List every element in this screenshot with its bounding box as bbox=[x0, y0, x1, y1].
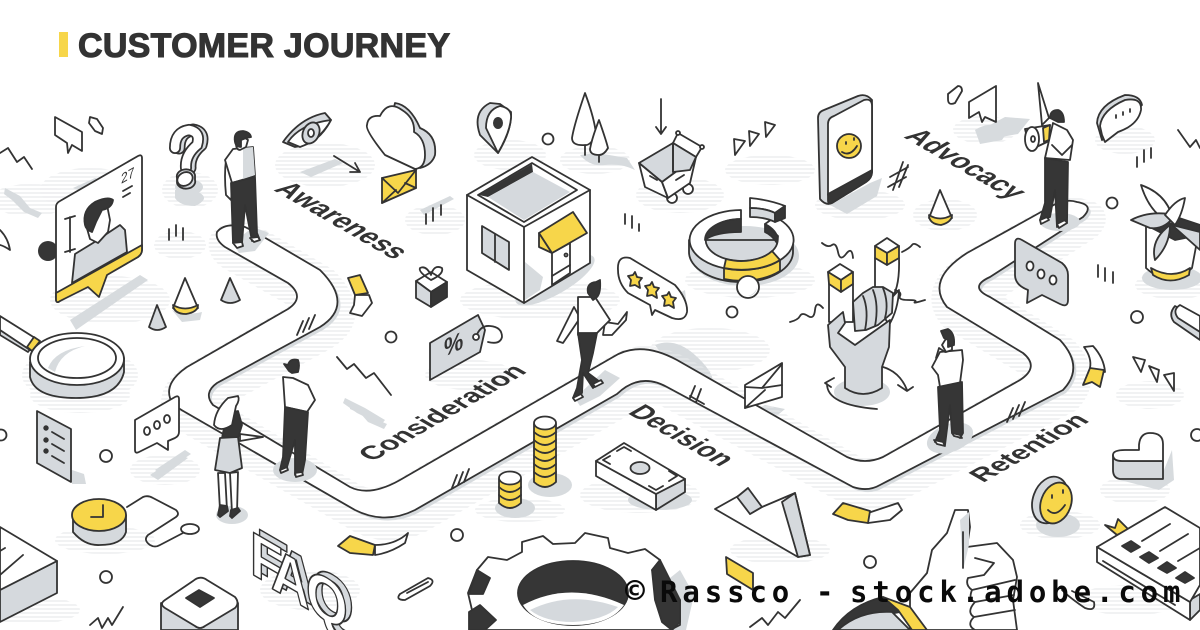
icon: question mark bbox=[175, 130, 203, 195]
road label: Decision: Decision bbox=[621, 400, 742, 471]
icon: rounded block bbox=[90, 578, 238, 630]
icon: eye bbox=[283, 113, 360, 172]
figure: woman bbox=[214, 396, 263, 524]
icon: outline speech and diamond top left bbox=[0, 117, 103, 250]
icon: right banner and triangles bbox=[1083, 346, 1174, 391]
icon: potted plant bbox=[1131, 185, 1200, 290]
icon: star rating bubble bbox=[618, 258, 687, 319]
title: CUSTOMER JOURNEY bbox=[78, 27, 450, 65]
icon: yellow banner bottom centre bbox=[338, 533, 433, 600]
illustration: magnet hand bbox=[790, 238, 925, 409]
icon: thumbs up bbox=[910, 510, 1017, 630]
icon: discount tag: % bbox=[444, 327, 463, 363]
watermark: - bbox=[816, 575, 838, 609]
watermark: Rassco bbox=[660, 575, 794, 609]
icon: right edge tube and circle bbox=[1131, 305, 1200, 340]
icon: FAQ letters: F bbox=[250, 518, 283, 606]
watermark: stock.adobe.com bbox=[850, 575, 1185, 609]
icon: FAQ letters: A bbox=[271, 533, 310, 624]
icon: gear bbox=[468, 533, 694, 630]
figure: person thinking at retention bbox=[923, 329, 977, 459]
icon: curved banner bbox=[348, 275, 372, 316]
icon: FAQ letters: F bbox=[256, 515, 289, 603]
watermark: © bbox=[625, 571, 650, 610]
winding road bbox=[169, 201, 1093, 528]
panel: calendar checklist block bbox=[1062, 507, 1200, 620]
icon: cloud with envelope bbox=[367, 103, 441, 224]
figure: megaphone person bbox=[1025, 83, 1080, 231]
icon: smiley coin bbox=[1026, 472, 1080, 537]
icon: FAQ letters bbox=[250, 515, 354, 630]
road label: Advocacy: Advocacy bbox=[897, 124, 1034, 204]
icon: small circles bbox=[0, 332, 1200, 583]
figure: walking person bbox=[557, 280, 627, 406]
icon: cones bbox=[149, 225, 240, 330]
icon: yellow banner right centre bbox=[833, 503, 902, 523]
icon: FAQ letters: A bbox=[277, 530, 316, 621]
icon: folded mountain bbox=[715, 488, 810, 627]
icon: coin stacks bbox=[495, 416, 572, 518]
panel: left slab bbox=[0, 527, 57, 622]
icon: cash bundle bbox=[596, 443, 692, 510]
road label: Retention: Retention bbox=[962, 409, 1096, 486]
icon: envelope bbox=[745, 363, 782, 408]
road label: Awareness: Awareness bbox=[267, 177, 416, 264]
icon: ring segment bottom bbox=[833, 597, 927, 630]
panel: profile card bbox=[38, 155, 142, 302]
icon: shopping cart bbox=[639, 99, 704, 203]
icon: triangles bbox=[625, 122, 775, 231]
road label: Consideration: Consideration bbox=[351, 360, 533, 465]
icon: gray chat bubble bbox=[1015, 239, 1113, 305]
panel: storefront building bbox=[467, 157, 601, 315]
panel: profile card: 27 bbox=[121, 163, 135, 187]
icon: discount tag bbox=[430, 315, 502, 380]
chart: donut ring bbox=[689, 198, 799, 318]
icon: map pin bbox=[478, 103, 554, 153]
icon: trees bbox=[572, 93, 608, 162]
icon: heart block bbox=[1113, 433, 1174, 490]
icon: checklist document bbox=[37, 411, 86, 484]
icon: gift box bbox=[416, 267, 447, 307]
figure: person at awareness bbox=[225, 131, 269, 253]
icon: chat bubble left bbox=[135, 396, 188, 480]
figure: man with cap bbox=[273, 357, 391, 482]
icon: smartphone with smiley bbox=[818, 95, 952, 225]
icon: top speech shapes bbox=[948, 86, 1010, 144]
icon: magnifying glass bbox=[0, 316, 138, 403]
icon: round chat bubble bbox=[1097, 95, 1200, 208]
icon: clock with wire bbox=[72, 496, 199, 546]
